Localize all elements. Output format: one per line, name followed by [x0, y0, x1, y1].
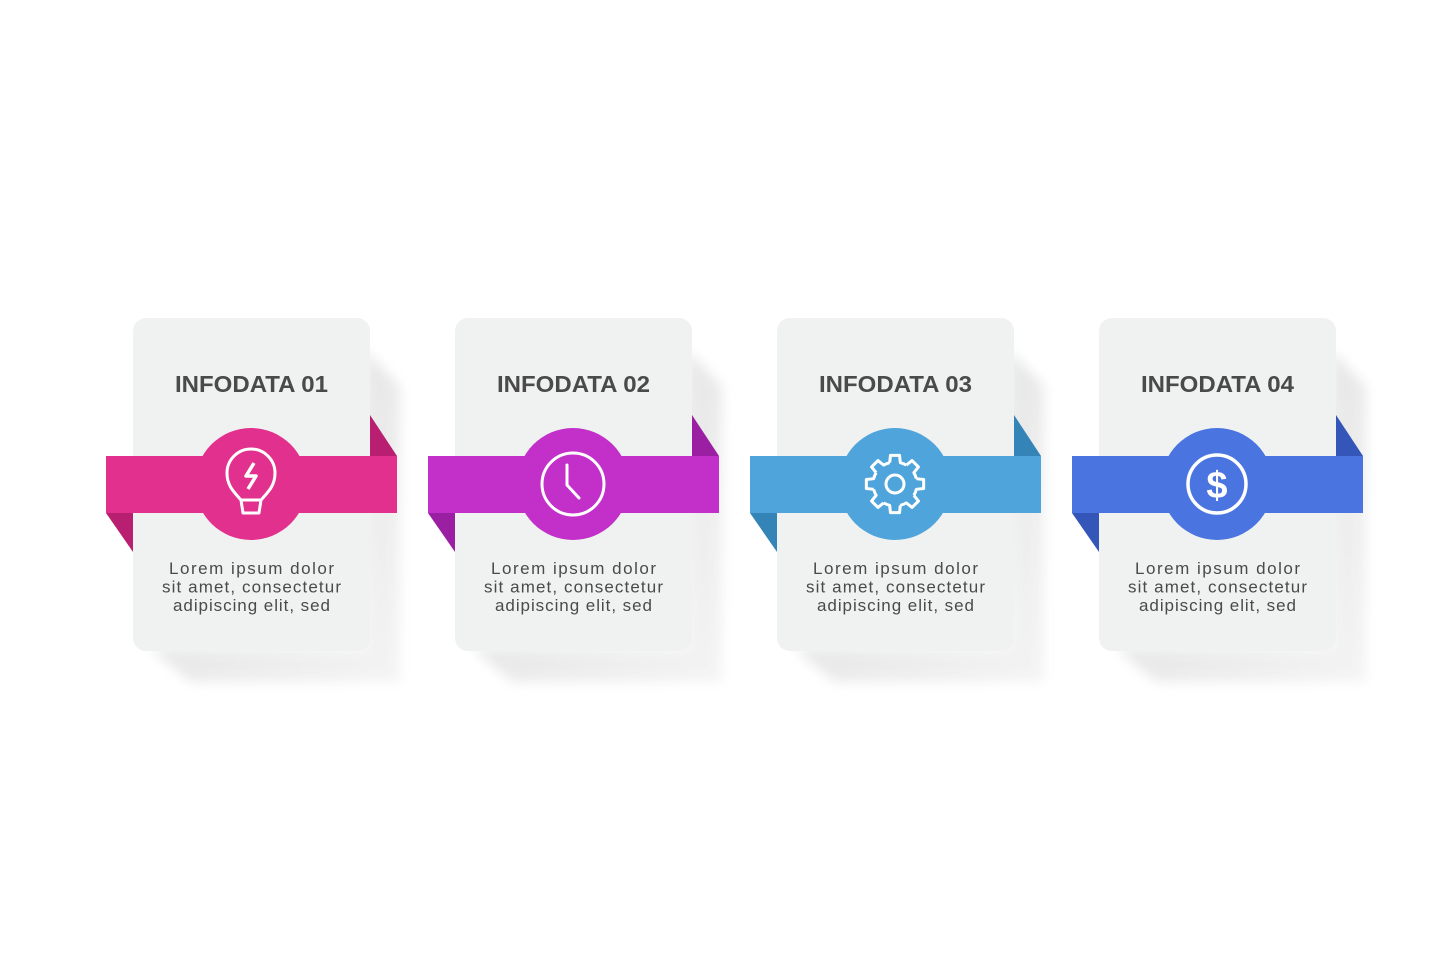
text: Lorem ipsum dolor [491, 559, 656, 578]
title: INFODATA 04 [1141, 371, 1294, 397]
text: Lorem ipsum dolor [813, 559, 978, 578]
text: adipiscing elit, sed [1139, 596, 1296, 615]
card 1 [106, 318, 400, 682]
card body [133, 318, 370, 651]
card body [777, 318, 1014, 651]
text: sit amet, consectetur [806, 578, 985, 596]
icon: dollar [1188, 455, 1246, 513]
text: adipiscing elit, sed [817, 596, 974, 615]
card 2 [428, 318, 722, 682]
shadow [150, 350, 400, 682]
shadow [1116, 350, 1366, 682]
text: sit amet, consectetur [484, 578, 663, 596]
shadow [472, 350, 722, 682]
title: INFODATA 03 [819, 371, 972, 397]
shadow [794, 350, 1044, 682]
ribbon [428, 415, 719, 552]
ribbon [1072, 415, 1363, 552]
icon: gear [866, 455, 924, 513]
icon: clock [542, 453, 604, 515]
icon: light bulb [227, 449, 275, 513]
text: adipiscing elit, sed [173, 596, 330, 615]
text: Lorem ipsum dolor [1135, 559, 1300, 578]
card body [455, 318, 692, 651]
ribbon [750, 415, 1041, 552]
card body [1099, 318, 1336, 651]
card 4 [1072, 318, 1366, 682]
icon: dollar: $ [1206, 465, 1228, 507]
title: INFODATA 02 [497, 371, 650, 397]
text: sit amet, consectetur [162, 578, 341, 596]
text: sit amet, consectetur [1128, 578, 1307, 596]
ribbon [106, 415, 397, 552]
card 3 [750, 318, 1044, 682]
text: adipiscing elit, sed [495, 596, 652, 615]
text: Lorem ipsum dolor [169, 559, 334, 578]
title: INFODATA 01 [175, 371, 328, 397]
